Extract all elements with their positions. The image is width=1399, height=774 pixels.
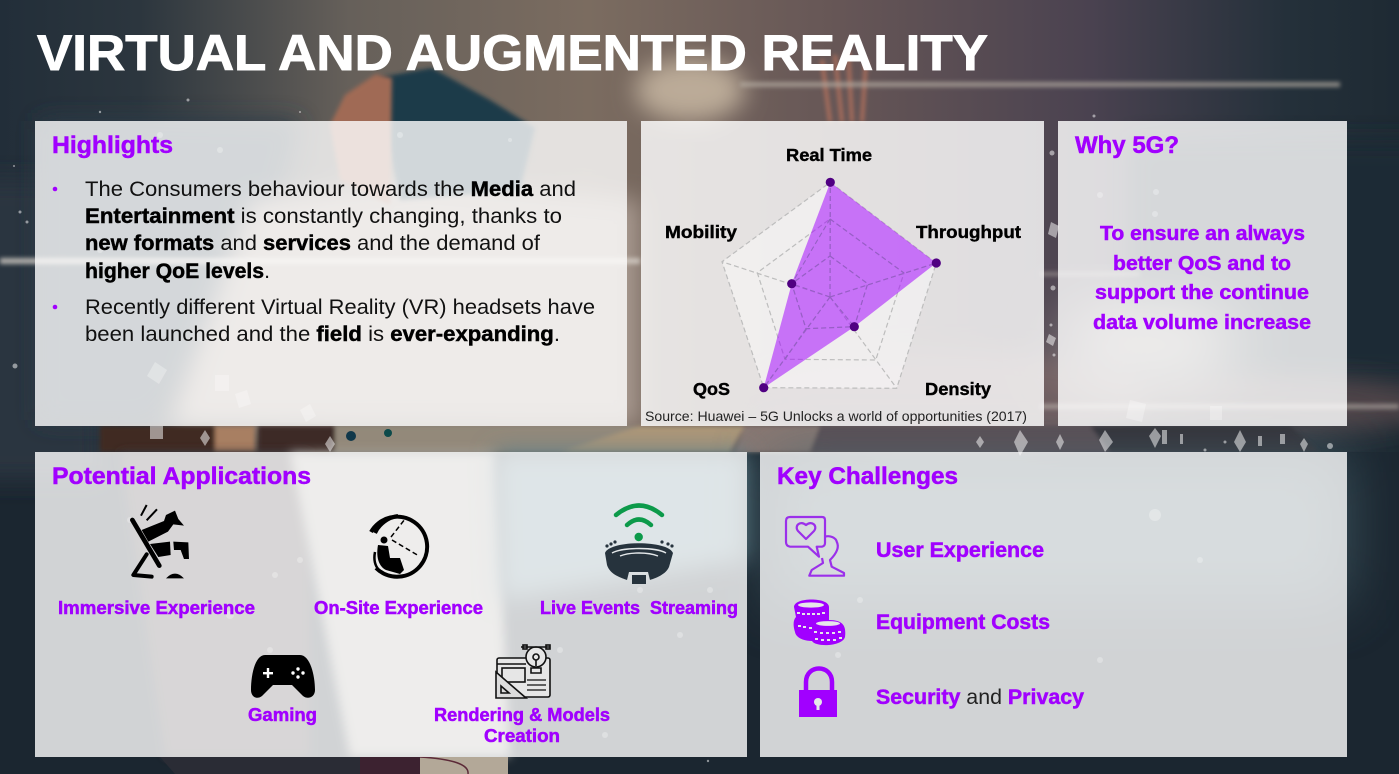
- radar data points: [759, 178, 941, 392]
- radar data area: [764, 182, 936, 388]
- panel: potential applications background: [35, 452, 747, 757]
- why 5G statement: [1093, 222, 1311, 334]
- why 5G statement: support the continue: [1095, 281, 1309, 304]
- woman: raised arms: [170, 180, 640, 426]
- radar axis labels: Density: [925, 379, 991, 399]
- heading: why 5G: Why 5G?: [1075, 132, 1179, 159]
- heading: potential applications: Potential Applications: [52, 463, 311, 490]
- bullet two: [53, 296, 595, 346]
- heading: highlights: Highlights: [52, 132, 173, 159]
- icon: security padlock: [799, 668, 837, 717]
- why 5G statement: data volume increase: [1093, 311, 1311, 334]
- sparkles under panels: [97, 132, 1222, 738]
- bullet one: new formats and services and the demand of: [85, 232, 540, 255]
- icon: rendering and models: [496, 645, 550, 698]
- radar axis labels: Throughput: [916, 222, 1021, 242]
- potential applications content: [52, 463, 738, 746]
- strip between panels: photo detail: [100, 426, 1320, 452]
- bullet one: higher QoE levels.: [85, 260, 270, 283]
- icon: user experience: [786, 517, 844, 576]
- radar axis labels: Real Time: [786, 145, 872, 165]
- radar axis labels: [665, 145, 1021, 399]
- panel: highlights background: [35, 121, 627, 426]
- panel: radar background: [641, 121, 1044, 426]
- icon: equipment costs coins: [794, 600, 845, 645]
- highlights content: [52, 132, 595, 346]
- label: rendering and models creation: Rendering & Models: [434, 705, 610, 725]
- icon: on-site experience: [371, 516, 427, 577]
- radar chart: [645, 145, 1027, 424]
- bullet two: been launched and the field is ever-expanding .: [85, 323, 560, 346]
- key challenges content: [777, 463, 1084, 717]
- panel: key challenges background: [760, 452, 1347, 757]
- icon: immersive experience: [132, 505, 189, 578]
- why 5G statement: better QoS and to: [1113, 252, 1291, 275]
- bullet one: [53, 178, 576, 283]
- woman: hand on headset: [330, 74, 392, 205]
- why 5G content: [1075, 132, 1311, 334]
- label: equipment costs: Equipment Costs: [876, 611, 1050, 634]
- radar source: Source: Huawei – 5G Unlocks a world of opportunities (2017): [645, 409, 1027, 424]
- woman: dark upper-left hair and shoulder area: [40, 121, 300, 420]
- radar axis labels: Mobility: [665, 222, 737, 242]
- bullet one: The Consumers behaviour towards the Media and: [85, 178, 576, 201]
- label: gaming: Gaming: [248, 705, 317, 725]
- label: user experience: User Experience: [876, 539, 1044, 562]
- why 5G statement: To ensure an always: [1100, 222, 1305, 245]
- lower photo under applications panel: [120, 452, 310, 757]
- bullet one: Entertainment is constantly changing, thanks to: [85, 205, 562, 228]
- label: rendering and models creation: [434, 705, 610, 746]
- label: security and privacy: Security and Privacy: [876, 686, 1084, 709]
- title: VIRTUAL AND AUGMENTED REALITY: [37, 25, 988, 81]
- light streaks: [740, 82, 1340, 87]
- woman: headset: [376, 68, 535, 200]
- bullet two: Recently different Virtual Reality (VR) headsets have: [85, 296, 595, 319]
- label: rendering and models creation: Creation: [484, 726, 560, 746]
- lower photo below panels: [160, 757, 360, 774]
- label: live events streaming: Live Events Streaming: [540, 598, 738, 618]
- label: immersive experience: Immersive Experience: [58, 598, 255, 618]
- icon: live events streaming: [605, 506, 674, 584]
- radar axis labels: QoS: [693, 379, 730, 399]
- label: on-site experience: On-Site Experience: [314, 598, 483, 618]
- icon: gaming controller: [251, 655, 315, 698]
- raised fingers: [822, 50, 866, 122]
- heading: key challenges: Key Challenges: [777, 463, 958, 490]
- panel: why 5G background: [1058, 121, 1347, 426]
